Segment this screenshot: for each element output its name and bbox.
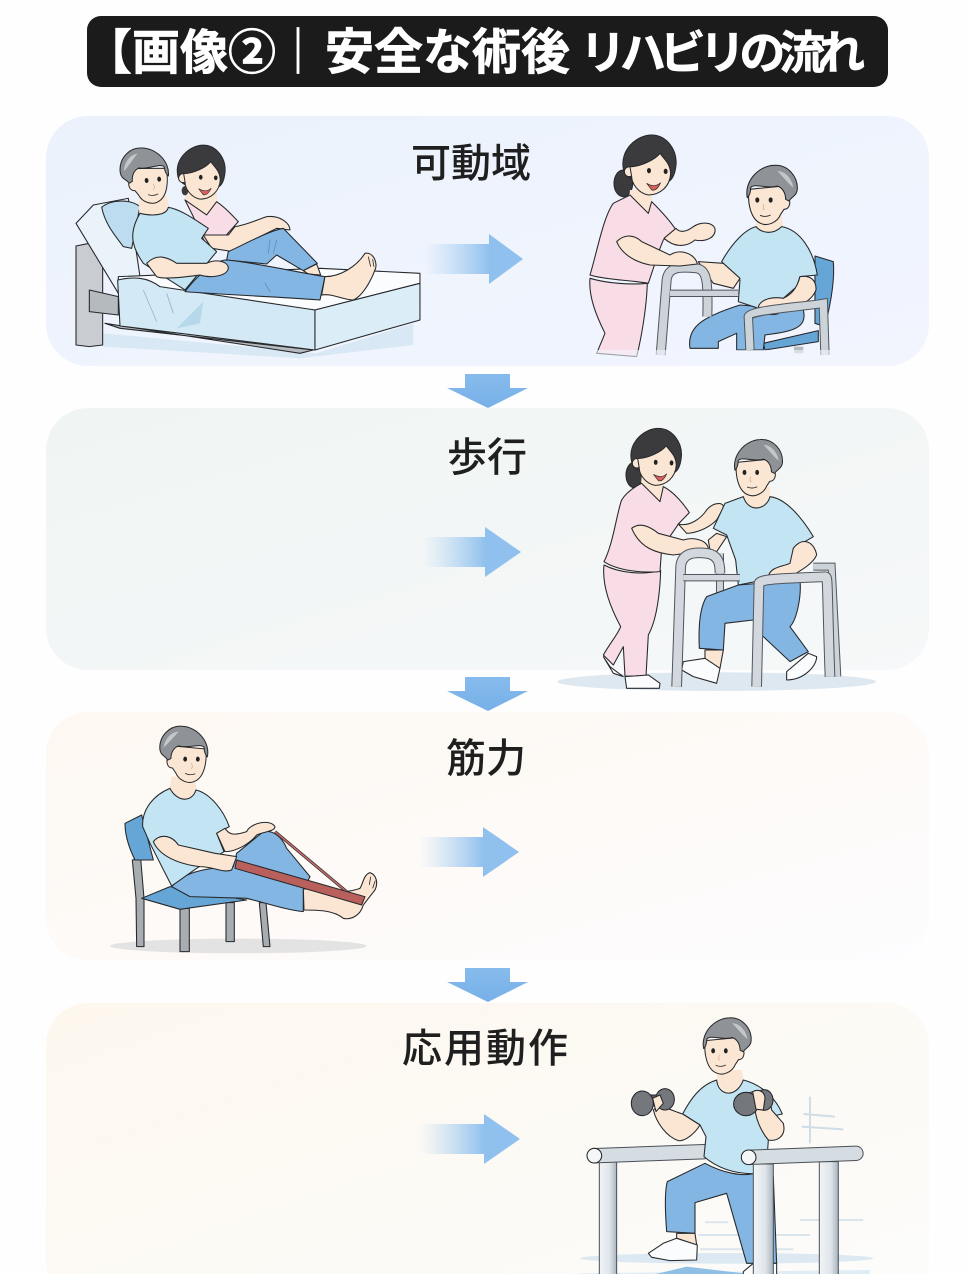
- patient: [682, 439, 817, 683]
- person: [648, 1018, 784, 1274]
- nurse standing: [590, 135, 715, 357]
- arrow: panel 1 progression: [425, 234, 523, 284]
- seated person: [143, 726, 377, 919]
- arrow: down 1: [447, 374, 528, 408]
- heading: 歩行: 歩行: [447, 436, 527, 480]
- nurse: [603, 428, 723, 688]
- heading: 可動域: 可動域: [411, 142, 531, 186]
- panel: muscle strength: [46, 712, 929, 960]
- title bar: 安全な術後: [325, 26, 570, 80]
- walker: [661, 268, 825, 355]
- resistance band: [235, 832, 365, 905]
- illustration: patient on bed with nurse: [76, 145, 420, 358]
- illustration: walking with walker: [557, 428, 876, 691]
- right parallel bar: [741, 1150, 856, 1274]
- arrow: panel 3 progression: [420, 827, 519, 877]
- rear walker tubes: [720, 553, 837, 677]
- floor shadow: [557, 672, 876, 691]
- heading: 応用動作: 応用動作: [402, 1027, 570, 1071]
- background and floor marks: [580, 1097, 873, 1274]
- arrow: down 3: [447, 968, 528, 1002]
- patient seated: [690, 165, 817, 350]
- title bar: 【画像②: [84, 27, 276, 80]
- chair: [125, 815, 270, 952]
- arrow: panel 2 progression: [423, 527, 521, 577]
- arrow: panel 4 progression: [420, 1114, 520, 1164]
- dumbbell left: [631, 1089, 674, 1116]
- front walker tubes: [677, 553, 830, 687]
- dumbbell right: [734, 1090, 773, 1116]
- panel: walking: [46, 408, 929, 670]
- chair: [763, 256, 834, 353]
- illustration: nurse helps patient sitting at walker: [590, 135, 834, 357]
- heading: 筋力: 筋力: [446, 737, 526, 781]
- panel: applied movements: [46, 1003, 929, 1274]
- illustration: stepping with dumbbells at parallel bars: [580, 1018, 873, 1274]
- nurse sitting behind: [177, 145, 290, 252]
- fade at base of illustration: [590, 350, 850, 358]
- panel: range of motion: [46, 116, 929, 366]
- title bar: リハビリの流れ: [580, 27, 865, 79]
- illustration: resistance band leg exercise on chair: [110, 726, 377, 953]
- front arm: [153, 836, 237, 871]
- left parallel bar: [587, 1148, 704, 1274]
- arrow: down 2: [447, 677, 528, 711]
- title bar: ｜: [275, 26, 321, 78]
- bed and frame: [76, 198, 420, 358]
- title bar: [84, 16, 888, 87]
- floor shadow: [110, 939, 367, 953]
- patient: [118, 145, 376, 300]
